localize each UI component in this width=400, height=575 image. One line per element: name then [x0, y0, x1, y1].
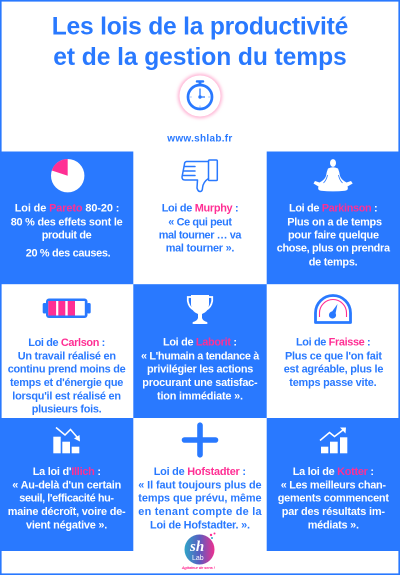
text: Carlson: temps et d'énergie que [10, 377, 123, 389]
panel: Pareto [0, 152, 133, 284]
icon: speedometer [316, 296, 350, 322]
logo: SH Lab: Lab [192, 555, 204, 562]
text: Carlson: lorsqu'il est réalisé en [12, 390, 121, 402]
icon: stopwatch in glowing circle [178, 74, 222, 118]
text: Fraisse: Plus ce que l'on fait [285, 350, 382, 362]
text: Carlson: continu prend moins de [8, 364, 126, 376]
icon: plus sign [184, 425, 216, 455]
text: Laborit [141, 337, 260, 402]
logo: SH Lab: Agitateur de sens ! [181, 565, 216, 570]
text: Kotter: gements commencent [278, 493, 389, 505]
icon: trophy [188, 295, 212, 324]
text: Fraisse [284, 337, 383, 389]
text: Fraisse: est agréable, plus le [284, 364, 383, 376]
text: Fraisse: temps passe vite. [289, 377, 377, 389]
text: Illich: seuil, l'efficacité hu- [19, 493, 114, 505]
text: Hofstadter: temps que prévu, même [138, 493, 262, 505]
title: Les lois de la productivité [52, 13, 348, 40]
text: Hofstadter: en tenant compte de la [138, 506, 263, 518]
text: Illich: vient négative ». [26, 519, 107, 531]
text: Hofstadter: Loi de Hofstadter. ». [150, 519, 250, 531]
text: Murphy: mal tourner … va [159, 230, 242, 242]
text: Kotter: par des résultats im- [282, 506, 385, 518]
text: Hofstadter: « Il faut toujours plus de [138, 479, 262, 491]
text: Hofstadter [138, 466, 263, 531]
text: Pareto: produit de [42, 230, 92, 242]
panel: Carlson [8, 298, 126, 416]
text: Hofstadter: Loi de Hofstadter : [154, 466, 246, 478]
text: Parkinson [277, 203, 391, 268]
panel: Parkinson [267, 152, 400, 284]
logo: SH Lab: sh [189, 539, 204, 555]
text: Illich: « Au-delà d'un certain [12, 479, 121, 491]
panel: Laborit [133, 284, 267, 418]
panel: Hofstadter [138, 425, 263, 531]
panel: Fraisse [284, 296, 383, 389]
text: Kotter: médiats ». [308, 519, 359, 531]
icon: thumb down [182, 160, 217, 192]
text: Laborit: « L'humain a tendance à [141, 350, 260, 362]
title: et de la gestion du temps [53, 44, 347, 71]
text: Carlson [8, 337, 126, 416]
text: Parkinson: Plus on a de temps [287, 216, 382, 228]
icon: pie chart [51, 159, 84, 192]
panel: Murphy [159, 160, 242, 255]
icon: rising bar chart [320, 428, 347, 453]
text: Pareto: 80 % des effets sont le [11, 216, 123, 228]
text: Pareto: 20 % des causes. [26, 247, 111, 259]
icon: battery [43, 298, 91, 318]
text: Laborit: Loi de Laborit : [163, 337, 237, 349]
panel: Illich [0, 418, 133, 551]
logo: SH Lab [181, 532, 216, 570]
text: Murphy: mal tourner ». [166, 243, 234, 255]
text: Pareto: Loi de Pareto 80-20 : [15, 203, 119, 215]
text: Carlson: Un travail réalisé en [18, 350, 116, 362]
panel: Kotter [267, 418, 400, 551]
text: Carlson: Loi de Carlson : [28, 337, 105, 349]
text: Kotter [278, 466, 389, 531]
text: Murphy: « Ce qui peut [168, 216, 232, 228]
text: Carlson: plusieurs fois. [32, 404, 102, 416]
text: Parkinson: Loi de Parkinson : [289, 203, 378, 215]
text: Laborit: procurant une satisfac- [142, 377, 258, 389]
icon: falling bar chart [53, 428, 80, 453]
text: Kotter: La loi de Kotter : [293, 466, 374, 478]
text: Murphy: Loi de Murphy : [162, 203, 239, 215]
text: Pareto [11, 203, 123, 259]
text: Laborit: privilégier les actions [147, 364, 253, 376]
title [52, 13, 348, 71]
text: Illich: maine décroît, voire de- [8, 506, 126, 518]
text: Illich: La loi d'Illich : [33, 466, 101, 478]
text: Parkinson: chose, plus on prendra [277, 243, 391, 255]
text: Parkinson: pour faire quelque [288, 230, 379, 242]
text: Murphy [159, 203, 242, 255]
website url: www.shlab.fr [166, 133, 232, 144]
text: Kotter: « Les meilleurs chan- [281, 479, 386, 491]
text: Fraisse: Loi de Fraisse : [296, 337, 371, 349]
icon: meditation figure [314, 159, 353, 191]
text: Parkinson: de temps. [309, 256, 358, 268]
text: Laborit: tion immédiate ». [157, 390, 243, 402]
text: Illich [8, 466, 126, 531]
